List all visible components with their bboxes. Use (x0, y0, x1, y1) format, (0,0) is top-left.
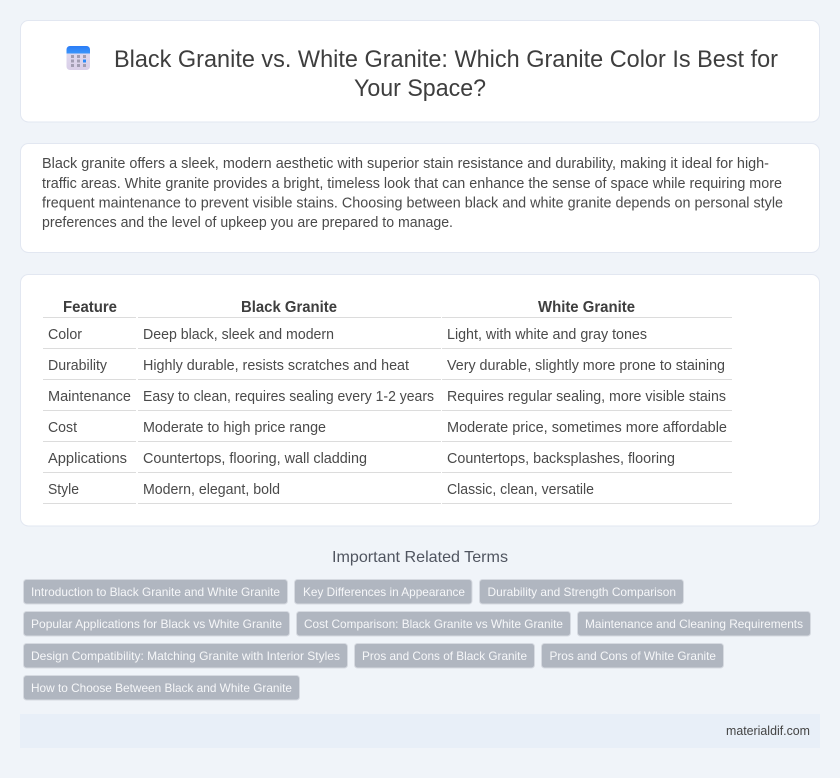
row: color: Deep black, sleek and modern (143, 327, 334, 343)
row: maintenance (48, 389, 726, 405)
tag: Design Compatibility: Matching Granite with Interior Styles (31, 649, 340, 663)
tag (24, 644, 348, 668)
row: durability: Very durable, slightly more prone to staining (447, 358, 725, 374)
row: style: Modern, elegant, bold (143, 482, 280, 498)
tag: Pros and Cons of Black Granite (362, 649, 527, 663)
icon: calendar (66, 46, 90, 70)
row: color (48, 327, 647, 343)
row: applications: Countertops, flooring, wall cladding (143, 451, 367, 467)
row: color: Light, with white and gray tones (447, 327, 647, 343)
table header (63, 299, 635, 316)
title (114, 46, 778, 102)
tag (354, 644, 534, 668)
row: durability (48, 358, 725, 374)
tag (24, 612, 290, 636)
panel: title card (20, 20, 820, 122)
text block: intro: traffic areas. White granite provides a bright, timeless look that can enhance the sense of space while requiring more (42, 176, 782, 192)
tag (294, 580, 472, 604)
row: applications: Countertops, backsplashes, flooring (447, 451, 675, 467)
row: color: Color (48, 327, 82, 343)
footer (20, 714, 820, 748)
tag (542, 644, 724, 668)
tag: Pros and Cons of White Granite (550, 649, 716, 663)
row: maintenance: Requires regular sealing, more visible stains (447, 389, 726, 405)
row: applications (48, 451, 675, 467)
tag: Key Differences in Appearance (303, 585, 465, 599)
footer: materialdif.com (726, 724, 810, 738)
tag: Durability and Strength Comparison (488, 585, 676, 599)
title: Your Space? (354, 75, 486, 102)
tag: Introduction to Black Granite and White Granite (31, 585, 280, 599)
tag: How to Choose Between Black and White Granite (31, 681, 292, 695)
row: style: Classic, clean, versatile (447, 482, 594, 498)
row: cost: Moderate price, sometimes more affordable (447, 420, 727, 436)
panel: intro paragraph (20, 144, 820, 252)
text block: intro: frequent maintenance to prevent visible stains. Choosing between black and white granite depends on personal style (42, 196, 783, 212)
tag (296, 612, 570, 636)
tag list: related terms (24, 580, 810, 700)
tag (480, 580, 684, 604)
text block: intro: preferences and the level of upkeep you are prepared to manage. (42, 215, 453, 231)
row: cost: Cost (48, 420, 77, 436)
row: maintenance: Easy to clean, requires sealing every 1-2 years (143, 389, 434, 405)
tag: Cost Comparison: Black Granite vs White Granite (304, 617, 563, 631)
table header: White Granite (538, 299, 635, 316)
tag: Maintenance and Cleaning Requirements (585, 617, 803, 631)
tag (24, 676, 300, 700)
row: maintenance: Maintenance (48, 389, 131, 405)
row: style (48, 482, 594, 498)
tag (578, 612, 810, 636)
table header: Black Granite (241, 299, 337, 316)
row: cost (48, 420, 727, 436)
tag (24, 580, 288, 604)
text block: intro (42, 156, 783, 231)
row: durability: Highly durable, resists scratches and heat (143, 358, 409, 374)
title: Black Granite vs. White Granite: Which Granite Color Is Best for (114, 46, 778, 73)
row: cost: Moderate to high price range (143, 420, 326, 436)
tag: Popular Applications for Black vs White Granite (31, 617, 282, 631)
row: applications: Applications (48, 451, 127, 467)
panel: comparison table (20, 274, 820, 526)
row: durability: Durability (48, 358, 108, 374)
row: style: Style (48, 482, 79, 498)
table header: Feature (63, 299, 117, 316)
text block: intro: Black granite offers a sleek, modern aesthetic with superior stain resistance and durability, making it ideal for high- (42, 156, 769, 172)
heading: important related terms: Important Related Terms (332, 549, 508, 566)
